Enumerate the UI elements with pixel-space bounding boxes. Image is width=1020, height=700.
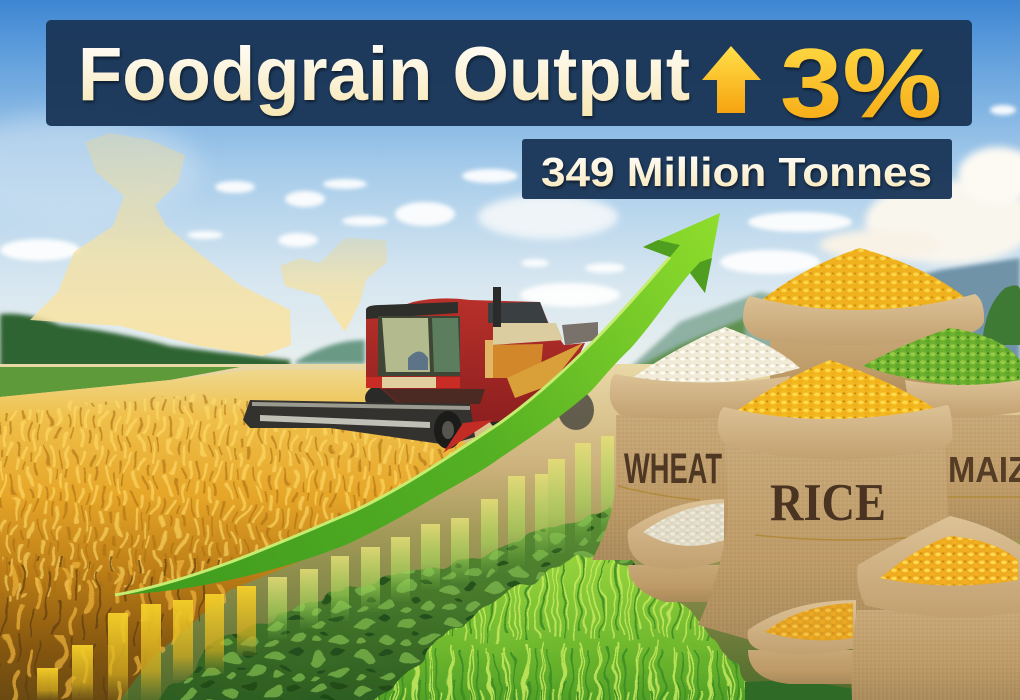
green growth arrow	[115, 213, 720, 595]
exhaust pipe	[493, 287, 501, 327]
label: wheat: WHEAT	[624, 445, 722, 493]
title text: Foodgrain Output	[78, 32, 690, 117]
rear wheels	[365, 384, 594, 430]
sack: rice	[698, 360, 952, 640]
field ground	[0, 364, 1020, 700]
cream side panel	[493, 323, 563, 345]
golden wheat field	[0, 370, 470, 700]
combine harvester	[243, 287, 598, 453]
clouds	[0, 105, 1020, 307]
sack: maize with green grain	[863, 328, 1020, 540]
green field strip	[0, 367, 240, 397]
small sack: white grain	[628, 499, 724, 602]
map of India silhouette	[30, 133, 387, 356]
cab	[366, 302, 460, 388]
orange panels	[485, 344, 543, 378]
rear grille	[562, 322, 598, 345]
sack: top back with yellow grain	[743, 248, 984, 400]
sack: wheat with white grain	[592, 327, 800, 560]
subtitle banner	[522, 139, 952, 199]
cutting header	[243, 400, 493, 453]
sack: corn front right	[852, 516, 1020, 700]
underside shadow	[382, 389, 485, 404]
harvester body	[366, 298, 585, 425]
percentage figure: 3%	[780, 28, 942, 138]
grain sacks	[592, 248, 1020, 700]
label: rice: RICE	[770, 474, 886, 532]
icon: up arrow	[702, 46, 761, 113]
rising bars	[37, 436, 614, 700]
bright green grass	[360, 548, 775, 700]
subtitle text: 349 Million Tonnes	[541, 149, 932, 195]
small sack: lentils	[748, 600, 856, 684]
hood window	[488, 302, 548, 323]
foliage crops	[140, 508, 640, 700]
distant hills	[0, 258, 1020, 372]
title banner	[46, 20, 972, 138]
foreground foliage right	[745, 635, 1020, 700]
sky background	[0, 0, 1020, 372]
